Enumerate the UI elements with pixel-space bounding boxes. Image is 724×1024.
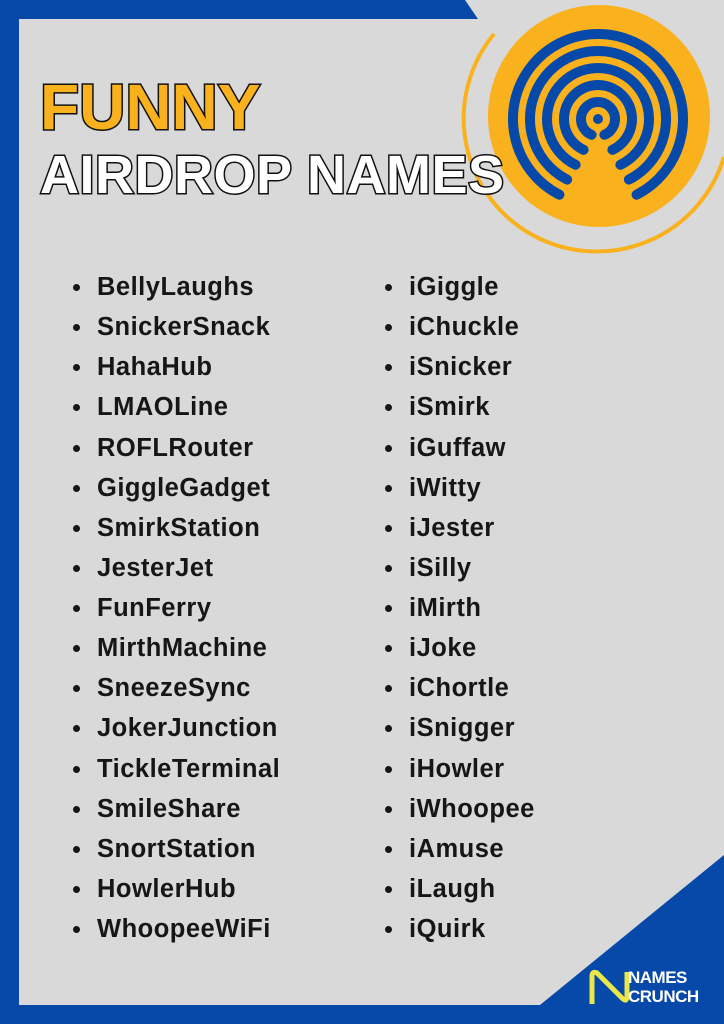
list: left column: WhoopeeWiFi [97, 915, 271, 943]
list: left column: JesterJet [97, 554, 214, 582]
list: right column: iMirth [409, 594, 481, 622]
list: right column [385, 273, 535, 943]
list: left column: SneezeSync [97, 674, 251, 702]
logo: CRUNCH [628, 987, 699, 1006]
list: left column: SnortStation [97, 835, 256, 863]
list: left column [73, 273, 280, 943]
list: right column: iGiggle [409, 273, 499, 301]
list: right column: iQuirk [409, 915, 486, 943]
logo [590, 968, 699, 1006]
icon: airdrop [462, 5, 724, 254]
list: left column: FunFerry [97, 594, 212, 622]
list: left column: ROFLRouter [97, 434, 254, 462]
list: left column: JokerJunction [97, 714, 278, 742]
list: right column: iChuckle [409, 313, 519, 341]
list: left column: MirthMachine [97, 634, 267, 662]
list: right column: iAmuse [409, 835, 504, 863]
list: right column: iSmirk [409, 393, 490, 421]
list: right column: iWhoopee [409, 795, 535, 823]
logo: NAMES [628, 968, 687, 987]
list: left column: HahaHub [97, 353, 212, 381]
list: right column: iGuffaw [409, 434, 506, 462]
title [39, 71, 505, 205]
list: left column: LMAOLine [97, 393, 228, 421]
list: left column: SnickerSnack [97, 313, 270, 341]
list: right column: iHowler [409, 754, 505, 782]
list: left column: HowlerHub [97, 875, 236, 903]
title: FUNNY [40, 71, 260, 143]
list: left column: SmirkStation [97, 514, 260, 542]
list: right column: iLaugh [409, 875, 496, 903]
list: right column: iJoke [409, 634, 477, 662]
list: left column: BellyLaughs [97, 273, 254, 301]
list: left column: TickleTerminal [97, 754, 280, 782]
title: AIRDROP NAMES [40, 145, 505, 205]
list: right column: iSnicker [409, 353, 512, 381]
list: right column: iSilly [409, 554, 472, 582]
list: right column: iChortle [409, 674, 509, 702]
list: right column: iSnigger [409, 714, 515, 742]
list: left column: SmileShare [97, 795, 241, 823]
list: right column: iWitty [409, 474, 481, 502]
list: right column: iJester [409, 514, 495, 542]
list: left column: GiggleGadget [97, 474, 270, 502]
